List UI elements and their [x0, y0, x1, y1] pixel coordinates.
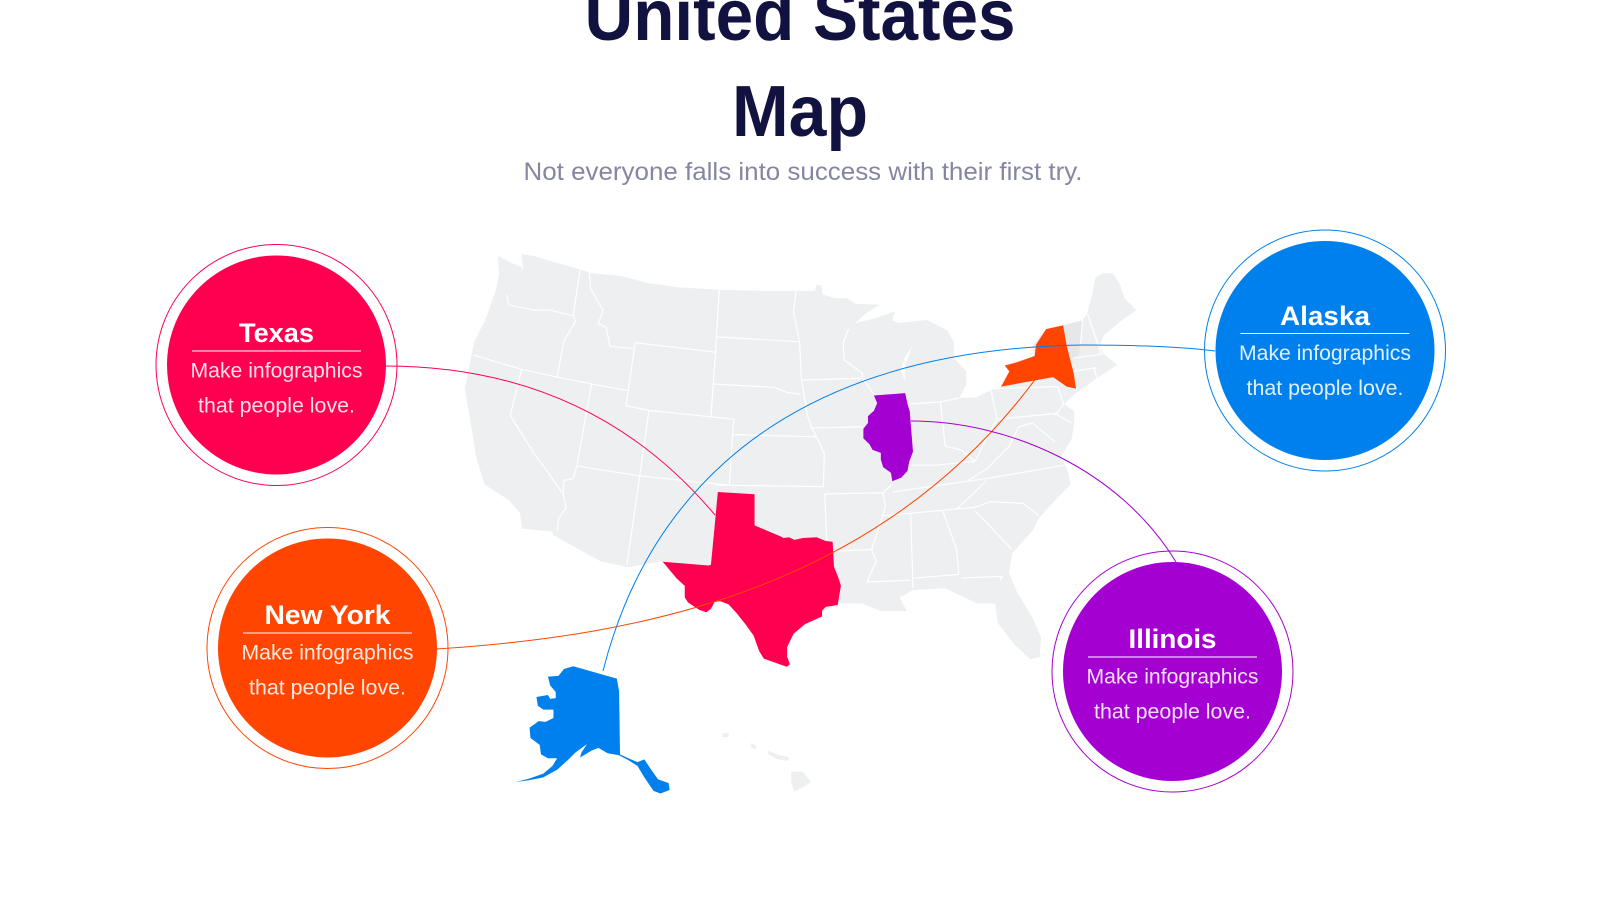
callout: New York	[207, 528, 448, 768]
map: contiguous United States	[465, 254, 1136, 659]
state: Texas	[663, 492, 841, 667]
callout: Illinois: Illinois	[1129, 624, 1216, 654]
connector: Illinois	[911, 421, 1176, 562]
callout: Texas	[156, 244, 397, 486]
connector: Texas	[385, 366, 715, 515]
subtitle: Not everyone falls into success with their first try.	[524, 158, 1082, 186]
title: Map	[732, 72, 868, 152]
callout: Illinois	[1052, 551, 1293, 792]
callout: Texas: Texas	[239, 318, 314, 348]
callout: Alaska	[1204, 230, 1446, 471]
map: Hawaii	[722, 733, 811, 792]
state: Illinois	[863, 393, 913, 481]
connector: Alaska	[603, 345, 1215, 671]
callout: New York: Make infographics	[242, 640, 414, 664]
title	[584, 0, 1016, 152]
callout: Alaska: Alaska	[1280, 301, 1371, 331]
connector: New York	[436, 377, 1037, 649]
state: Alaska	[516, 666, 670, 794]
callout: Illinois: that people love.	[1094, 700, 1251, 724]
state: New York	[1001, 325, 1076, 389]
callout: Alaska: that people love.	[1246, 376, 1404, 400]
callout: Texas: Make infographics	[190, 358, 362, 382]
callout: Illinois: Make infographics	[1086, 664, 1258, 688]
callout: New York: New York	[265, 600, 392, 630]
callout: New York: that people love.	[249, 676, 406, 700]
callout: Texas: that people love.	[198, 394, 355, 418]
callout: Alaska: Make infographics	[1239, 341, 1411, 365]
